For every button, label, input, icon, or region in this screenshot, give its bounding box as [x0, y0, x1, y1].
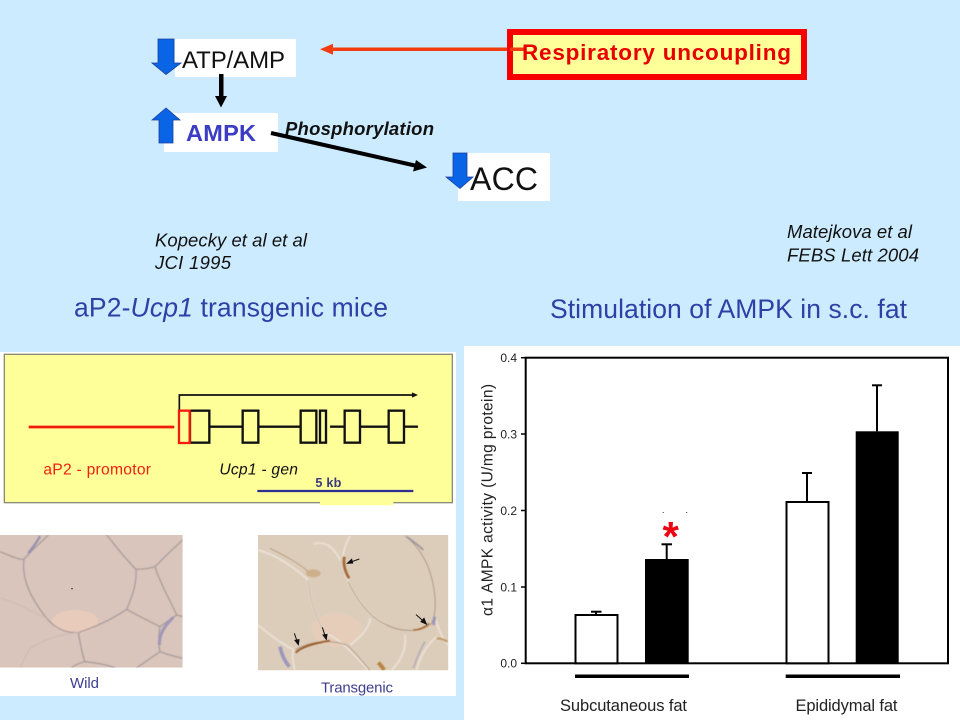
- label: Transgenic: Transgenic: [321, 680, 394, 696]
- label: Epididymal fat: Epididymal fat: [796, 697, 898, 715]
- y axis labels: 0.3: [500, 428, 517, 442]
- label: ATP/AMP: ATP/AMP: [182, 47, 285, 74]
- label: AMPK: [164, 113, 278, 152]
- heading: transgenic mice: aP2-Ucp1 transgenic mice: [74, 292, 388, 322]
- gene construct diagram: [4, 354, 452, 505]
- label: ACC: [458, 153, 550, 201]
- plot frame: [526, 358, 948, 663]
- y axis labels: 0.1: [500, 580, 517, 594]
- label: Ucp1 gen: Ucp1 - gen: [219, 461, 298, 478]
- label: AMPK: AMPK: [186, 120, 256, 146]
- arrow: respiratory uncoupling to ATP/AMP: [320, 44, 526, 55]
- heading: stimulation of AMPK: Stimulation of AMPK in s.c. fat: [550, 294, 908, 324]
- photo: wild: [0, 535, 183, 668]
- citation: Matejkova: FEBS Lett 2004: [787, 244, 919, 266]
- y axis labels: 0.2: [500, 504, 517, 518]
- icon: down arrow ATP/AMP: [152, 39, 181, 74]
- y axis ticks: [521, 358, 526, 663]
- icon: down arrow ACC: [446, 153, 473, 188]
- micrographs: [0, 535, 448, 696]
- scale bar: 5 kb: [315, 476, 342, 490]
- citation: Kopecky: Kopecky et al et al: [155, 230, 308, 250]
- callout: Respiratory uncoupling: [510, 32, 804, 77]
- label: aP2 promotor: aP2 - promotor: [43, 461, 151, 478]
- intron lines and exons: [190, 411, 418, 443]
- group bars: [575, 674, 900, 678]
- photo: transgenic: [258, 535, 448, 670]
- panel: bar chart: [464, 346, 960, 720]
- arrow: AMPK to ACC: [271, 133, 427, 172]
- label: Subcutaneous fat: Subcutaneous fat: [560, 697, 687, 715]
- bar: epididymal control: [786, 473, 828, 663]
- label: Phosphorylation: Phosphorylation: [285, 118, 434, 139]
- promoter: [29, 411, 190, 443]
- transcription arrow: [179, 392, 418, 411]
- panel: transgene and histology: [0, 352, 456, 696]
- y axis labels: 0.0: [500, 656, 517, 670]
- y axis labels: 0.4: [500, 351, 517, 365]
- flow diagram: [152, 32, 804, 201]
- bar: subcutaneous treated: [645, 544, 689, 663]
- black arrows: [294, 559, 426, 645]
- significance asterisk: [663, 512, 687, 560]
- arrow: ATP/AMP to AMPK: [215, 74, 227, 108]
- citation: Matejkova: Matejkova et al: [787, 221, 913, 242]
- y axis labels: [500, 351, 517, 670]
- icon: up arrow AMPK: [152, 108, 180, 143]
- callout: Respiratory uncoupling: Respiratory uncoupling: [522, 40, 791, 65]
- citation: Kopecky: JCI 1995: [154, 252, 232, 273]
- bar: epididymal treated: [856, 385, 899, 663]
- label: ACC: ACC: [470, 161, 538, 197]
- label: ATP/AMP: [175, 39, 296, 77]
- label: Wild: Wild: [70, 675, 99, 692]
- significance asterisk: *: [663, 513, 680, 560]
- y axis title: α1 AMPK activity (U/mg protein): [480, 384, 496, 616]
- bar: subcutaneous control: [576, 612, 618, 663]
